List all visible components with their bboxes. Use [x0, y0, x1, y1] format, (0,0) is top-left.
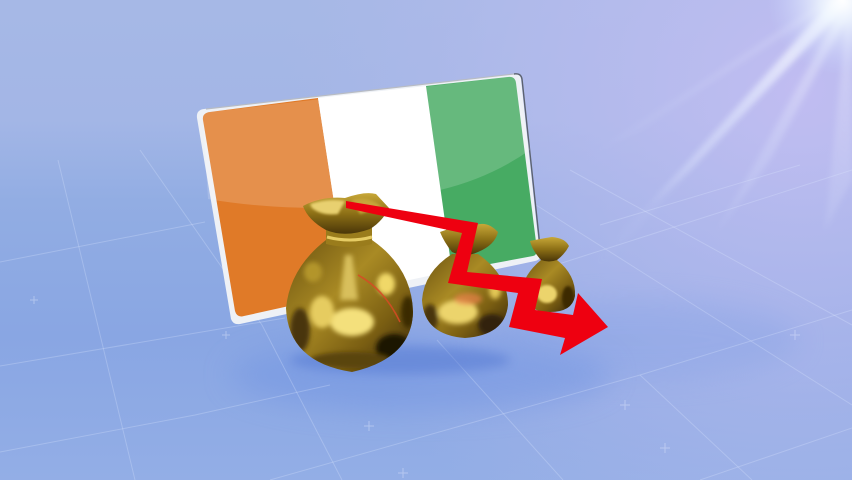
money bag: small [521, 237, 575, 312]
money bag: large [286, 193, 415, 372]
medium bag mouth [440, 224, 498, 255]
card dark right edge [514, 74, 541, 256]
white stripe [318, 86, 452, 293]
orange stripe [203, 98, 348, 316]
card frame [197, 74, 540, 324]
green stripe [426, 77, 537, 271]
large bag body [286, 240, 413, 372]
large bag mouth [303, 193, 389, 234]
gloss highlight [203, 77, 530, 208]
perspective floor grid [0, 150, 852, 480]
grid tick marks [30, 296, 800, 478]
light rays from top right [530, 0, 852, 330]
bag ground shadow [290, 346, 510, 374]
red falling arrow [346, 201, 608, 355]
money bag: medium [422, 224, 508, 338]
large bag neck [326, 226, 372, 247]
card top edge [206, 74, 514, 109]
small bag mouth [530, 237, 569, 262]
flag card [197, 74, 541, 324]
